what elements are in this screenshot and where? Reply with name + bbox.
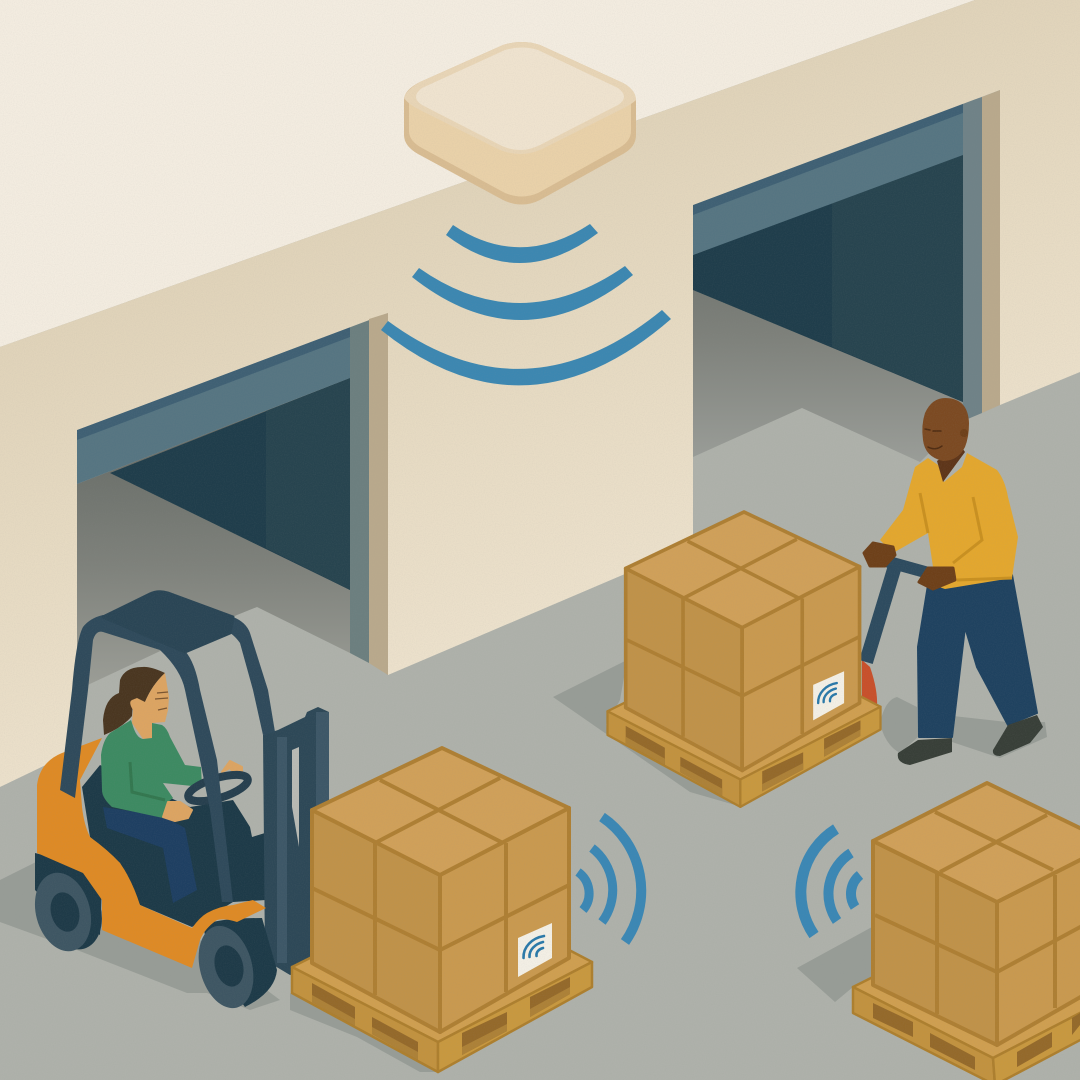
wireless waves: front box <box>578 817 641 942</box>
trousers <box>918 575 1037 737</box>
interior back wall <box>693 152 963 402</box>
worker in yellow sweater <box>864 398 1043 765</box>
door header <box>693 103 963 255</box>
ceiling <box>0 0 975 347</box>
neck <box>937 445 965 482</box>
face details <box>925 429 942 449</box>
pallet <box>853 975 1080 1058</box>
left loading dock door <box>77 319 369 690</box>
door header <box>77 327 350 484</box>
pallet jack <box>862 566 895 707</box>
forklift with driver <box>27 592 329 1014</box>
cab interior <box>82 765 266 927</box>
wireless waves: right box <box>801 829 860 935</box>
sensor top <box>404 42 636 154</box>
right loading dock door <box>693 97 982 462</box>
forklift body <box>37 738 266 968</box>
upper hand <box>222 761 242 777</box>
front wheel <box>190 920 262 1014</box>
face and neck <box>130 673 169 739</box>
roll cage <box>60 592 275 902</box>
pallet jack handle <box>889 562 925 572</box>
door jamb <box>963 97 982 421</box>
sweater fold <box>130 762 165 800</box>
interior back wall <box>110 378 350 590</box>
sensor signal waves <box>381 224 671 385</box>
ear <box>960 429 968 437</box>
sweater folds <box>920 493 1012 580</box>
driver <box>101 667 242 903</box>
mast <box>263 707 329 975</box>
floor shadows <box>0 660 1047 1072</box>
head <box>922 398 969 461</box>
door jamb <box>350 319 369 663</box>
interior floor <box>77 378 350 690</box>
trousers <box>103 807 197 903</box>
rear wheel <box>27 853 110 958</box>
box faces <box>873 841 997 1045</box>
front wheel arch <box>203 918 277 1007</box>
ceiling wireless sensor <box>404 42 636 204</box>
shoes <box>898 715 1043 765</box>
sensor rim <box>404 42 636 204</box>
box tape lines <box>875 812 1080 1014</box>
pallet slots <box>873 1003 1080 1070</box>
face details <box>155 692 168 710</box>
back wall <box>0 0 1080 787</box>
green sweater <box>101 720 202 818</box>
hands <box>864 543 955 589</box>
pallet box: right, cropped <box>853 783 1080 1080</box>
pallet box: centre with tag <box>608 512 880 807</box>
hair and ponytail <box>103 667 165 735</box>
sensor side <box>409 45 631 196</box>
lower hand <box>163 802 192 821</box>
interior floor <box>693 152 963 462</box>
door side reveals <box>369 90 1000 675</box>
pallet box: front with tag <box>292 748 592 1072</box>
steering wheel <box>185 769 251 807</box>
sweater <box>880 453 1018 589</box>
